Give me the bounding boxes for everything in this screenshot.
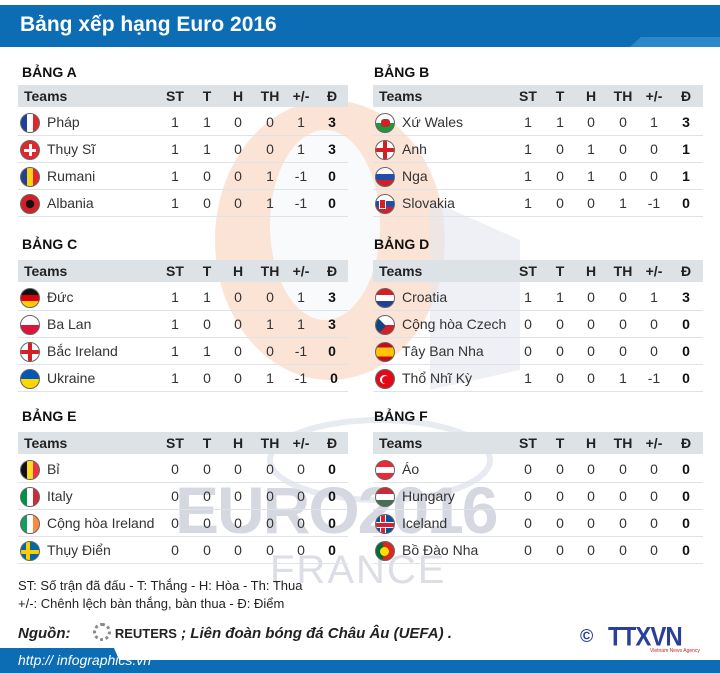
- table A: 0: [328, 168, 336, 184]
- table C: Bắc Ireland: [47, 343, 118, 359]
- table E: [18, 432, 348, 564]
- table B: 1: [556, 114, 564, 130]
- table F: Iceland: [402, 515, 447, 531]
- table E: H: [233, 435, 243, 451]
- table F: 0: [587, 515, 595, 531]
- table E: 0: [328, 461, 336, 477]
- table A: 0: [234, 114, 242, 130]
- table C: 3: [328, 289, 336, 305]
- background logo: [215, 102, 520, 503]
- table C: +/-: [293, 263, 309, 279]
- table C: 0: [234, 316, 242, 332]
- table F: 0: [650, 461, 658, 477]
- table F: 0: [556, 515, 564, 531]
- table B: Đ: [681, 88, 691, 104]
- table D: [373, 260, 703, 392]
- table B: 0: [556, 141, 564, 157]
- table E: 0: [328, 542, 336, 558]
- table A: 1: [203, 114, 211, 130]
- table E: 0: [297, 488, 305, 504]
- table B: T: [556, 88, 564, 104]
- table D: H: [586, 263, 596, 279]
- table E: 0: [297, 515, 305, 531]
- table D: Thổ Nhĩ Kỳ: [402, 370, 472, 386]
- table A: Albania: [47, 195, 94, 211]
- table D: 0: [556, 316, 564, 332]
- table B: 1: [524, 195, 532, 211]
- table C: T: [203, 263, 211, 279]
- legend text: ST: Số trận đã đấu - T: Thắng - H: Hòa - Th: Thua: [18, 578, 302, 593]
- table C: 1: [171, 316, 179, 332]
- table B: 1: [524, 141, 532, 157]
- table F: 0: [619, 488, 627, 504]
- table D: 0: [682, 370, 690, 386]
- group F title: BẢNG F: [374, 408, 428, 424]
- table D: 1: [524, 370, 532, 386]
- table A: 1: [171, 141, 179, 157]
- table C: -1: [295, 343, 307, 359]
- table B: 0: [619, 114, 627, 130]
- table D: 0: [682, 343, 690, 359]
- table D: 0: [587, 316, 595, 332]
- table E: +/-: [293, 435, 309, 451]
- table D: Tây Ban Nha: [402, 343, 484, 359]
- table C: 1: [297, 289, 305, 305]
- table A: Đ: [327, 88, 337, 104]
- watermark text EURO2016: EURO2016: [175, 473, 497, 547]
- table B: 0: [619, 168, 627, 184]
- table C: 0: [328, 343, 336, 359]
- table C: 1: [266, 316, 274, 332]
- title bar: Bảng xếp hạng Euro 2016: [20, 13, 277, 36]
- table E: 0: [297, 461, 305, 477]
- table A: 0: [203, 195, 211, 211]
- table B: [373, 85, 703, 217]
- table C: 0: [203, 316, 211, 332]
- table C: H: [233, 263, 243, 279]
- table A: 1: [171, 195, 179, 211]
- table F: 0: [524, 542, 532, 558]
- table B: 1: [524, 168, 532, 184]
- table F: ST: [519, 435, 537, 451]
- table F: 0: [556, 542, 564, 558]
- table A: 1: [266, 195, 274, 211]
- table C: Ukraine: [47, 370, 95, 386]
- table C: 3: [328, 316, 336, 332]
- table A: [18, 85, 348, 217]
- table A: -1: [295, 168, 307, 184]
- table F: T: [556, 435, 564, 451]
- table F: Teams: [379, 435, 422, 451]
- table D: Cộng hòa Czech: [402, 316, 506, 332]
- table C: Đ: [327, 263, 337, 279]
- table B: Anh: [402, 141, 427, 157]
- table E: 0: [203, 542, 211, 558]
- group A title: BẢNG A: [22, 64, 77, 80]
- table E: 0: [266, 488, 274, 504]
- table A: H: [233, 88, 243, 104]
- table B: 1: [587, 141, 595, 157]
- table F: 0: [650, 515, 658, 531]
- table E: 0: [203, 488, 211, 504]
- table E: 0: [328, 515, 336, 531]
- table A: 1: [203, 141, 211, 157]
- table C: 0: [203, 370, 211, 386]
- table F: 0: [524, 488, 532, 504]
- table F: 0: [524, 515, 532, 531]
- table A: 0: [266, 114, 274, 130]
- table B: 0: [587, 195, 595, 211]
- table F: 0: [556, 461, 564, 477]
- table F: 0: [587, 542, 595, 558]
- table F: 0: [556, 488, 564, 504]
- table C: 0: [330, 370, 338, 386]
- table E: 0: [171, 488, 179, 504]
- table B: TH: [614, 88, 632, 104]
- legend text: +/-: Chênh lệch bàn thắng, bàn thua - Đ: Điểm: [18, 596, 284, 611]
- table F: 0: [682, 515, 690, 531]
- table B: Slovakia: [402, 195, 455, 211]
- table D: 0: [682, 316, 690, 332]
- table E: T: [203, 435, 211, 451]
- table C: 1: [171, 289, 179, 305]
- group E title: BẢNG E: [22, 408, 76, 424]
- table F: TH: [614, 435, 632, 451]
- table B: -1: [648, 195, 660, 211]
- table A: Thụy Sĩ: [47, 141, 95, 157]
- table D: 3: [682, 289, 690, 305]
- table A: 1: [297, 141, 305, 157]
- table F: 0: [587, 488, 595, 504]
- table A: -1: [295, 195, 307, 211]
- table A: ST: [166, 88, 184, 104]
- table D: T: [556, 263, 564, 279]
- table C: Teams: [24, 263, 67, 279]
- table E: 0: [328, 488, 336, 504]
- table A: 0: [328, 195, 336, 211]
- table B: Teams: [379, 88, 422, 104]
- table E: 0: [234, 461, 242, 477]
- table F: Hungary: [402, 488, 455, 504]
- group D title: BẢNG D: [374, 236, 429, 252]
- table D: 0: [619, 289, 627, 305]
- table C: Đức: [47, 289, 73, 305]
- table A: Rumani: [47, 168, 95, 184]
- table A: 1: [171, 114, 179, 130]
- table B: 1: [682, 168, 690, 184]
- table C: 0: [266, 289, 274, 305]
- table E: 0: [234, 542, 242, 558]
- table E: Italy: [47, 488, 73, 504]
- table E: 0: [171, 461, 179, 477]
- table D: 1: [650, 289, 658, 305]
- table B: Nga: [402, 168, 428, 184]
- table D: Teams: [379, 263, 422, 279]
- table A: 1: [297, 114, 305, 130]
- table A: 0: [234, 168, 242, 184]
- table C: 1: [203, 289, 211, 305]
- table C: Ba Lan: [47, 316, 91, 332]
- table B: 0: [556, 195, 564, 211]
- table A: 0: [266, 141, 274, 157]
- footer bar: http:// infographics.vn: [18, 652, 151, 668]
- table F: 0: [682, 461, 690, 477]
- table A: 0: [234, 195, 242, 211]
- table C: 0: [266, 343, 274, 359]
- table E: 0: [203, 515, 211, 531]
- table A: TH: [261, 88, 279, 104]
- table F: 0: [650, 542, 658, 558]
- table F: +/-: [646, 435, 662, 451]
- table D: 0: [587, 370, 595, 386]
- logo: TTXVN: ©: [580, 626, 593, 646]
- table C: 1: [171, 343, 179, 359]
- table C: 0: [234, 343, 242, 359]
- table F: [373, 432, 703, 564]
- table A: 3: [328, 114, 336, 130]
- table F: 0: [619, 542, 627, 558]
- table D: 0: [524, 316, 532, 332]
- table E: ST: [166, 435, 184, 451]
- table E: 0: [266, 542, 274, 558]
- logo: TTXVN: TTXVN: [608, 623, 682, 652]
- table B: 0: [619, 141, 627, 157]
- table D: 0: [650, 316, 658, 332]
- table F: 0: [619, 461, 627, 477]
- table A: 1: [266, 168, 274, 184]
- table A: 3: [328, 141, 336, 157]
- table C: 1: [203, 343, 211, 359]
- table D: TH: [614, 263, 632, 279]
- table D: 1: [619, 370, 627, 386]
- logo: TTXVN: Vietnam News Agency: [650, 648, 700, 654]
- table F: H: [586, 435, 596, 451]
- table A: 1: [171, 168, 179, 184]
- table F: 0: [682, 488, 690, 504]
- table D: 0: [556, 343, 564, 359]
- table D: 0: [524, 343, 532, 359]
- watermark text FRANCE: FRANCE: [270, 548, 446, 592]
- group B title: BẢNG B: [374, 64, 429, 80]
- table B: 1: [619, 195, 627, 211]
- table E: 0: [297, 542, 305, 558]
- table C: 1: [266, 370, 274, 386]
- table D: 0: [650, 343, 658, 359]
- table F: 0: [682, 542, 690, 558]
- table E: 0: [171, 515, 179, 531]
- table F: 0: [650, 488, 658, 504]
- table C: -1: [295, 370, 307, 386]
- source line: Nguồn: REUTERS ; Liên đoàn bóng đá Châu Âu (UEFA) .: [18, 625, 452, 642]
- table E: Teams: [24, 435, 67, 451]
- table E: 0: [266, 515, 274, 531]
- table D: 1: [556, 289, 564, 305]
- title bar: [0, 5, 720, 47]
- table B: 1: [524, 114, 532, 130]
- table F: 0: [619, 515, 627, 531]
- footer bar: [0, 648, 720, 673]
- table E: 0: [234, 515, 242, 531]
- table E: 0: [234, 488, 242, 504]
- table B: 1: [682, 141, 690, 157]
- table D: Đ: [681, 263, 691, 279]
- table E: Thụy Điển: [47, 542, 111, 558]
- table A: +/-: [293, 88, 309, 104]
- table D: -1: [648, 370, 660, 386]
- table E: Đ: [327, 435, 337, 451]
- table E: 0: [266, 461, 274, 477]
- table D: ST: [519, 263, 537, 279]
- table F: 0: [524, 461, 532, 477]
- logo: TTXVN: [580, 623, 700, 654]
- table E: TH: [261, 435, 279, 451]
- table A: 0: [203, 168, 211, 184]
- table B: 0: [587, 114, 595, 130]
- table F: 0: [587, 461, 595, 477]
- table F: Đ: [681, 435, 691, 451]
- table E: Bỉ: [47, 461, 59, 477]
- table B: 1: [650, 114, 658, 130]
- table B: Xứ Wales: [402, 114, 463, 130]
- table A: Pháp: [47, 114, 80, 130]
- table C: 0: [234, 370, 242, 386]
- table D: 0: [619, 343, 627, 359]
- table B: 1: [587, 168, 595, 184]
- table E: 0: [203, 461, 211, 477]
- table D: 0: [556, 370, 564, 386]
- table B: 0: [650, 168, 658, 184]
- table C: ST: [166, 263, 184, 279]
- table A: Teams: [24, 88, 67, 104]
- table B: ST: [519, 88, 537, 104]
- table B: 0: [682, 195, 690, 211]
- table E: 0: [171, 542, 179, 558]
- table D: 0: [619, 316, 627, 332]
- table B: 0: [650, 141, 658, 157]
- table B: H: [586, 88, 596, 104]
- table C: [18, 260, 348, 392]
- table C: 0: [234, 289, 242, 305]
- table F: Áo: [402, 461, 419, 477]
- table B: 3: [682, 114, 690, 130]
- table A: T: [203, 88, 211, 104]
- table E: Cộng hòa Ireland: [47, 515, 154, 531]
- legend text: [18, 578, 302, 611]
- table B: +/-: [646, 88, 662, 104]
- table D: 0: [587, 343, 595, 359]
- table F: Bồ Đào Nha: [402, 542, 478, 558]
- table C: 1: [297, 316, 305, 332]
- table B: 0: [556, 168, 564, 184]
- table A: 0: [234, 141, 242, 157]
- table D: 1: [524, 289, 532, 305]
- table D: Croatia: [402, 289, 447, 305]
- table D: 0: [587, 289, 595, 305]
- table D: +/-: [646, 263, 662, 279]
- table C: TH: [261, 263, 279, 279]
- group C title: BẢNG C: [22, 236, 77, 252]
- table C: 1: [171, 370, 179, 386]
